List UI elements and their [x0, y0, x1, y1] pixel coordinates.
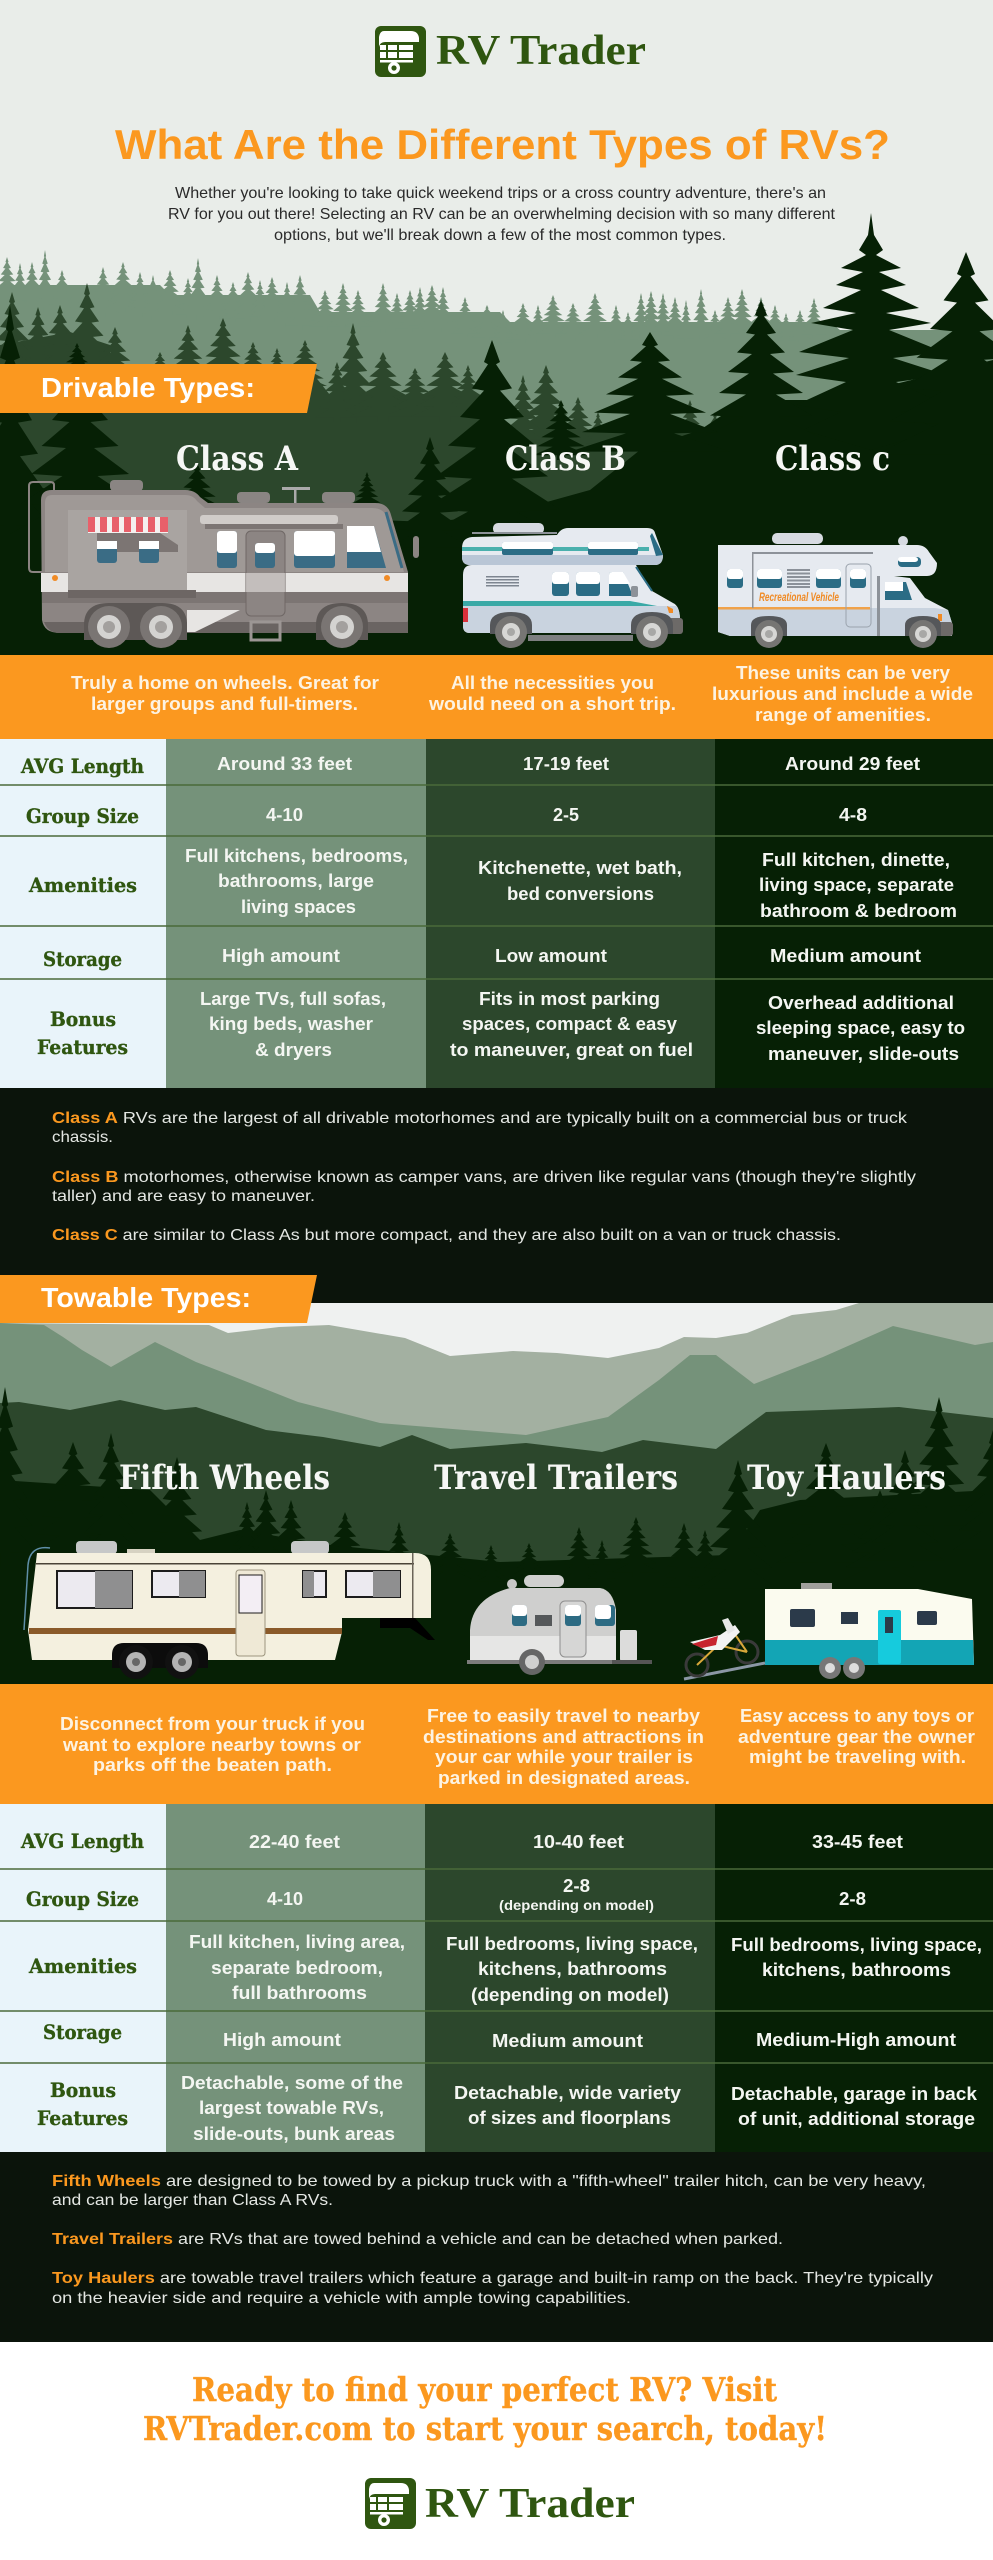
logo: RV Trader top — [375, 26, 646, 77]
comparison table: towable: of unit, additional storage — [738, 2109, 975, 2129]
comparison table: drivable: Amenities — [28, 873, 137, 897]
orange description band: towable: adventure gear the owner — [738, 1726, 975, 1747]
orange description band: towable: parked in designated areas. — [438, 1767, 690, 1788]
comparison table: drivable: bathrooms, large — [218, 871, 374, 891]
description panel: towable: and can be larger than Class A RVs. — [52, 2192, 333, 2209]
comparison table: towable: 33-45 feet — [812, 1832, 903, 1852]
comparison table: drivable: Around 29 feet — [785, 754, 920, 774]
comparison table: towable: Full kitchen, living area, — [189, 1932, 405, 1952]
comparison table: drivable: Overhead additional — [768, 993, 954, 1013]
comparison table: towable: 22-40 feet — [249, 1832, 340, 1852]
intro text: options, but we'll break down a few of the most common types. — [274, 227, 726, 244]
forest: mid tree layer — [0, 283, 760, 560]
description panel: towable: Travel Trailers are RVs that are towed behind a vehicle and can be detached when parked. — [52, 2231, 783, 2248]
heading: Class B: Class B — [505, 439, 626, 479]
comparison table: drivable: living space, separate — [759, 875, 954, 895]
banner: Towable Types: Towable Types: — [41, 1282, 251, 1313]
logo: RV Trader bottom: RV Trader — [425, 2481, 635, 2527]
description panel: drivable: Class B motorhomes, otherwise known as camper vans, are driven like regular vans (though they're slightly — [52, 1169, 916, 1186]
description panel: towable: Toy Haulers are towable travel trailers which feature a garage and built-in ramp on the back. They're typically — [52, 2270, 933, 2287]
comparison table: towable: Detachable, wide variety — [454, 2083, 681, 2103]
comparison table: drivable: spaces, compact & easy — [462, 1014, 677, 1034]
comparison table: towable: 2-8 — [563, 1876, 590, 1896]
orange description band: towable: want to explore nearby towns or — [62, 1734, 361, 1755]
banner: Drivable Types — [0, 364, 317, 413]
comparison table: towable: kitchens, bathrooms — [762, 1960, 951, 1980]
dark strip above mountains — [317, 1275, 993, 1303]
intro text: Whether you're looking to take quick weekend trips or a cross country adventure, there's an — [175, 185, 826, 202]
description panel: drivable — [0, 1088, 993, 1304]
orange description band: drivable: larger groups and full-timers. — [91, 693, 358, 714]
comparison table: towable: (depending on model) — [499, 1897, 654, 1913]
comparison table: towable: kitchens, bathrooms — [478, 1959, 667, 1979]
vehicle: Class A motorhome — [29, 480, 419, 648]
comparison table: drivable: sleeping space, easy to — [756, 1018, 965, 1038]
description panel: drivable: Class A RVs are the largest of all drivable motorhomes and are typically built on a commercial bus or truck — [52, 1110, 908, 1127]
call to action: RVTrader.com to start your search, today! — [143, 2409, 827, 2448]
vehicle: toy hauler with motorbike — [684, 1583, 974, 1679]
intro text — [168, 185, 836, 244]
orange description band: towable: parks off the beaten path. — [93, 1754, 332, 1775]
comparison table: towable: slide-outs, bunk areas — [193, 2124, 395, 2144]
intro text: RV for you out there! Selecting an RV can be an overwhelming decision with so many different — [168, 206, 836, 223]
heading: Travel Trailers: Travel Trailers — [434, 1458, 678, 1498]
comparison table: drivable: Around 33 feet — [217, 754, 352, 774]
heading: Fifth Wheels: Fifth Wheels — [119, 1458, 330, 1498]
orange description band: drivable: luxurious and include a wide — [712, 683, 973, 704]
orange description band: towable: Disconnect from your truck if you — [60, 1713, 365, 1734]
comparison table: drivable: 4-8 — [839, 805, 867, 825]
comparison table: towable: Group Size — [26, 1887, 139, 1911]
comparison table: towable: separate bedroom, — [211, 1958, 383, 1978]
orange description band: drivable: would need on a short trip. — [428, 693, 676, 714]
comparison table: drivable: & dryers — [255, 1040, 332, 1060]
comparison table: towable: 2-8 — [839, 1889, 866, 1909]
comparison table: drivable: Fits in most parking — [479, 989, 660, 1009]
comparison table: drivable: living spaces — [241, 897, 356, 917]
comparison table: towable: (depending on model) — [471, 1985, 669, 2005]
comparison table: drivable: Group Size — [26, 804, 139, 828]
description panel: towable: Fifth Wheels are designed to be towed by a pickup truck with a "fifth-wheel" trailer hitch, can be very heavy, — [52, 2173, 926, 2190]
comparison table: towable: 10-40 feet — [533, 1832, 624, 1852]
orange description band: towable: destinations and attractions in — [423, 1726, 704, 1747]
comparison table: drivable: Full kitchen, dinette, — [762, 850, 950, 870]
logo: RV Trader bottom — [365, 2478, 635, 2529]
comparison table: drivable: Low amount — [495, 946, 607, 966]
orange description band: towable: your car while your trailer is — [435, 1746, 693, 1767]
comparison table: drivable: Storage — [43, 947, 122, 971]
description panel: towable — [0, 2152, 993, 2342]
comparison table: towable: Bonus — [50, 2078, 116, 2102]
comparison table: drivable: 2-5 — [553, 805, 579, 825]
vehicle: travel trailer — [467, 1575, 652, 1675]
comparison table: towable: Detachable, garage in back — [731, 2084, 978, 2104]
vehicle: fifth wheel trailer — [24, 1541, 435, 1679]
description panel: drivable: taller) and are easy to maneuver. — [52, 1188, 315, 1205]
heading: Toy Haulers: Toy Haulers — [747, 1458, 946, 1498]
comparison table: drivable: Large TVs, full sofas, — [200, 989, 386, 1009]
comparison table: drivable: 4-10 — [266, 805, 303, 825]
heading: Class c: Class c — [775, 439, 890, 479]
orange description band: drivable: Truly a home on wheels. Great for — [71, 672, 379, 693]
vehicle: Class C motorhome: Recreational Vehicle — [759, 592, 839, 604]
comparison table: drivable: to maneuver, great on fuel — [450, 1040, 693, 1060]
comparison table: towable: Full bedrooms, living space, — [731, 1935, 982, 1955]
comparison table: towable: largest towable RVs, — [199, 2098, 384, 2118]
vehicle: Class B camper van — [462, 523, 683, 648]
comparison table: towable: Full bedrooms, living space, — [446, 1934, 698, 1954]
banner: Drivable Types: Drivable Types: — [41, 372, 255, 403]
comparison table: drivable: Medium amount — [770, 946, 921, 966]
comparison table: towable: Features — [37, 2106, 128, 2130]
comparison table: drivable: bed conversions — [507, 884, 654, 904]
forest: light tree layer — [0, 250, 993, 520]
orange description band: towable: might be traveling with. — [749, 1746, 966, 1767]
description panel: drivable: chassis. — [52, 1129, 113, 1146]
comparison table: drivable — [0, 739, 993, 1088]
orange description band: towable: Free to easily travel to nearby — [427, 1705, 701, 1726]
description panel: drivable: Class C are similar to Class As but more compact, and they are also built on a van or truck chassis. — [52, 1227, 841, 1244]
orange description band: towable: Easy access to any toys or — [740, 1705, 974, 1726]
comparison table: towable: 4-10 — [267, 1889, 303, 1909]
call to action — [143, 2370, 827, 2448]
title: What Are the Different Types of RVs? — [115, 121, 890, 168]
comparison table: drivable: Bonus — [50, 1007, 116, 1031]
comparison table: towable: full bathrooms — [232, 1983, 367, 2003]
comparison table: drivable: maneuver, slide-outs — [768, 1044, 959, 1064]
vehicle: Class C motorhome — [718, 533, 953, 648]
comparison table: drivable: king beds, washer — [209, 1014, 373, 1034]
comparison table: towable — [0, 1804, 993, 2152]
comparison table: towable: Storage — [43, 2020, 122, 2044]
mountain scene: towable — [0, 1303, 993, 1690]
description panel: towable: on the heavier side and require a vehicle with ample towing capabilities. — [52, 2290, 631, 2307]
comparison table: drivable: Features — [37, 1035, 128, 1059]
forest: dark foreground trees — [0, 213, 993, 660]
comparison table: towable: of sizes and floorplans — [468, 2108, 671, 2128]
comparison table: drivable: 17-19 feet — [523, 754, 609, 774]
comparison table: drivable: Kitchenette, wet bath, — [478, 858, 682, 878]
comparison table: towable: AVG Length — [20, 1829, 144, 1853]
comparison table: towable: Medium-High amount — [756, 2030, 956, 2050]
comparison table: towable: Medium amount — [492, 2031, 643, 2051]
comparison table: drivable: AVG Length — [20, 754, 144, 778]
orange description band: drivable: These units can be very — [736, 662, 951, 683]
comparison table: towable: Amenities — [28, 1954, 137, 1978]
logo: RV Trader top: RV Trader — [436, 28, 646, 74]
comparison table: drivable: High amount — [222, 946, 340, 966]
comparison table: towable: High amount — [223, 2030, 341, 2050]
comparison table: drivable: Full kitchens, bedrooms, — [185, 846, 408, 866]
banner: Towable Types — [0, 1275, 317, 1323]
comparison table: drivable: bathroom & bedroom — [760, 901, 957, 921]
orange description band: towable — [0, 1684, 993, 1804]
orange description band: drivable: All the necessities you — [451, 672, 654, 693]
heading: Class A: Class A — [176, 439, 299, 479]
orange description band: drivable: range of amenities. — [755, 704, 931, 725]
orange description band: drivable — [0, 655, 993, 739]
comparison table: towable: Detachable, some of the — [181, 2073, 403, 2093]
call to action: Ready to find your perfect RV? Visit — [192, 2370, 778, 2409]
header panel — [0, 0, 993, 660]
